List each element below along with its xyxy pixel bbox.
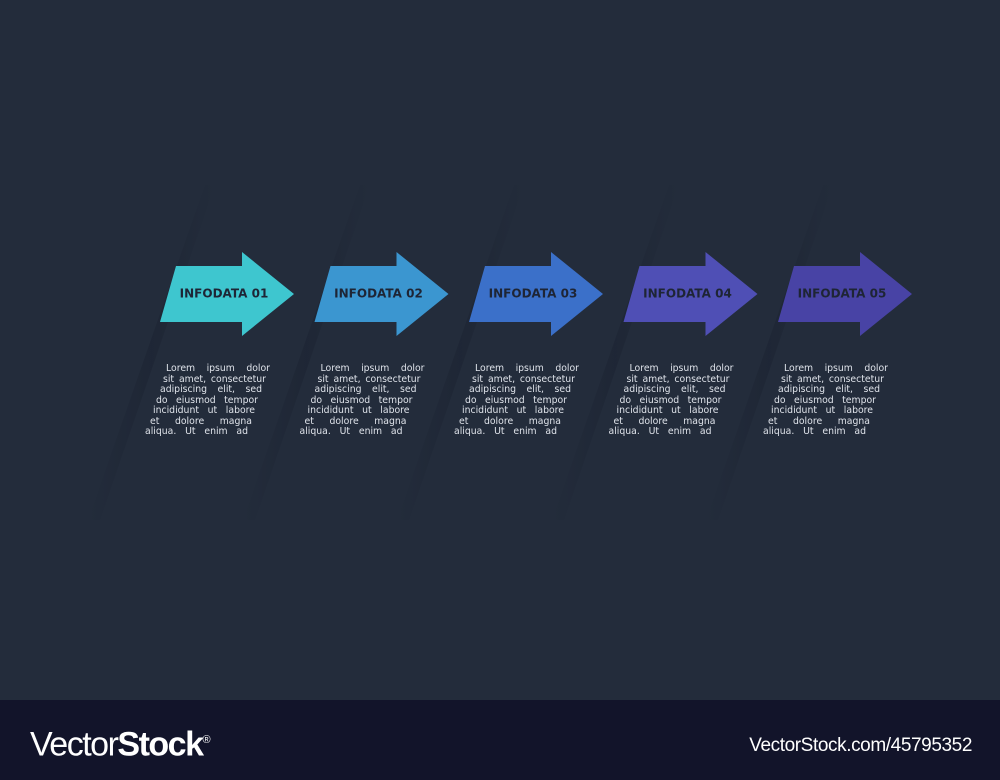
text: sit amet, consectetur xyxy=(472,374,575,384)
text: Lorem ipsum dolor xyxy=(784,363,888,374)
text: incididunt ut labore xyxy=(616,405,718,416)
text: sit amet, consectetur xyxy=(163,374,266,384)
text: do eiusmod tempor xyxy=(156,394,258,406)
arrow 3 xyxy=(469,252,603,336)
arrow 4: INFODATA 04 xyxy=(643,286,732,300)
text: et dolore magna xyxy=(768,416,870,426)
text: aliqua. Ut enim ad xyxy=(300,426,402,437)
text: adipiscing elit, sed xyxy=(624,384,726,395)
text: incididunt ut labore xyxy=(771,405,873,416)
text: aliqua. Ut enim ad xyxy=(763,426,866,437)
text: adipiscing elit, sed xyxy=(314,384,416,395)
text: Lorem ipsum dolor xyxy=(630,363,734,374)
arrow 1: INFODATA 01 xyxy=(180,286,268,300)
text: adipiscing elit, sed xyxy=(469,384,571,395)
arrow 5: INFODATA 05 xyxy=(798,286,886,300)
footer url: VectorStock.com/45795352 xyxy=(749,735,972,756)
text block 5 xyxy=(763,363,888,437)
text block 3 xyxy=(454,363,579,437)
text block 2 xyxy=(300,363,424,437)
text block 1 xyxy=(145,363,270,437)
text: incididunt ut labore xyxy=(308,405,410,416)
text: incididunt ut labore xyxy=(462,405,564,416)
text: aliqua. Ut enim ad xyxy=(145,426,248,437)
text: Lorem ipsum dolor xyxy=(320,363,424,374)
text: aliqua. Ut enim ad xyxy=(608,426,712,437)
text: sit amet, consectetur xyxy=(626,374,730,384)
text: aliqua. Ut enim ad xyxy=(454,426,557,437)
footer bar xyxy=(0,700,1000,780)
text: do eiusmod tempor xyxy=(774,394,876,406)
text: sit amet, consectetur xyxy=(781,374,884,384)
text: et dolore magna xyxy=(304,416,406,426)
text: Lorem ipsum dolor xyxy=(475,363,579,374)
arrow 2: INFODATA 02 xyxy=(334,286,423,300)
text: adipiscing elit, sed xyxy=(778,384,880,395)
text: et dolore magna xyxy=(459,416,561,426)
footer logo: VectorStock® xyxy=(30,725,211,763)
arrow 5 xyxy=(778,252,912,336)
arrow 1 xyxy=(160,252,294,336)
text: et dolore magna xyxy=(150,416,252,426)
text: sit amet, consectetur xyxy=(318,374,420,384)
text: do eiusmod tempor xyxy=(310,394,412,406)
text: do eiusmod tempor xyxy=(465,394,567,406)
text: do eiusmod tempor xyxy=(620,394,722,406)
text: Lorem ipsum dolor xyxy=(166,363,270,374)
arrow 3: INFODATA 03 xyxy=(489,286,577,300)
text: et dolore magna xyxy=(614,416,716,426)
arrow 2 xyxy=(314,252,448,336)
arrow 4 xyxy=(624,252,758,336)
text block 4 xyxy=(608,363,734,437)
text: incididunt ut labore xyxy=(153,405,255,416)
text: adipiscing elit, sed xyxy=(160,384,262,395)
